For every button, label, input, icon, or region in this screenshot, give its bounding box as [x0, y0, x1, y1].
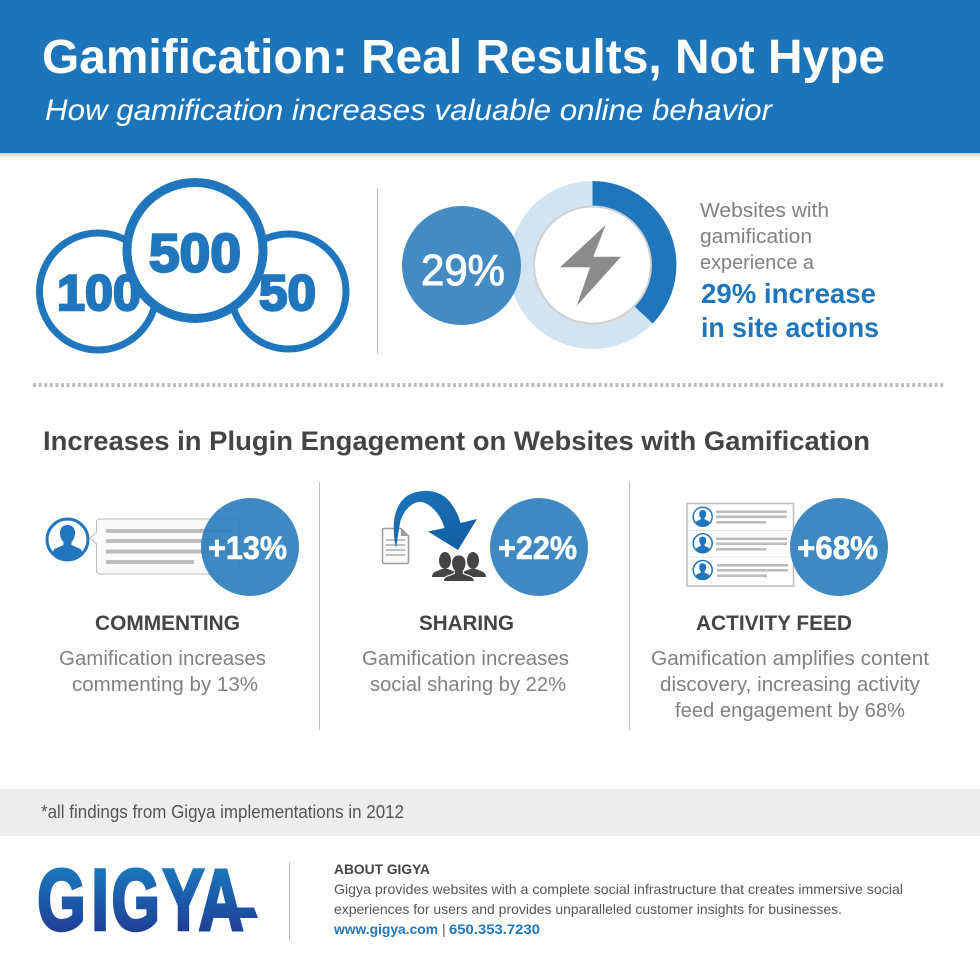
- points circles: 100, 500, 50: [40, 182, 346, 350]
- about text block: 650.353.7230: [449, 921, 540, 937]
- subtitle: How gamification increases valuable online behavior: [45, 94, 773, 127]
- footnote band: [0, 789, 980, 836]
- about text block: [333, 861, 903, 937]
- badge: +68%: [790, 498, 888, 596]
- label: sharing: SHARING: [419, 612, 514, 635]
- panel: sharing: [362, 491, 588, 696]
- badge: 29%: 29%: [421, 246, 505, 295]
- description: activity feed: feed engagement by 68%: [675, 700, 905, 722]
- text block: site actions: in site actions: [701, 312, 879, 343]
- footnote band: *all findings from Gigya implementations in 2012: [41, 802, 404, 822]
- badge: +68%: +68%: [797, 530, 878, 566]
- description: activity feed: discovery, increasing activity: [660, 674, 920, 696]
- about text block: |: [442, 921, 446, 937]
- description: commenting: Gamification increases: [59, 648, 266, 670]
- title: Gamification: Real Results, Not Hype: [42, 31, 885, 84]
- icon: curved arrow: [394, 491, 477, 550]
- header banner: [0, 0, 980, 158]
- section heading: Increases in Plugin Engagement on Websites with Gamification: [43, 426, 870, 456]
- about text block: experiences for users and provides unparalleled customer insights for businesses.: [334, 901, 842, 917]
- points circles: 100, 500, 50: 500: [149, 224, 241, 284]
- badge: +22%: +22%: [498, 530, 577, 566]
- description: commenting: commenting by 13%: [72, 674, 258, 696]
- panel: commenting: [47, 498, 299, 696]
- points circles: 100, 500, 50: 50: [259, 265, 316, 321]
- label: activity feed: ACTIVITY FEED: [696, 612, 852, 635]
- badge: +13%: [201, 498, 299, 596]
- icon: document: [382, 528, 408, 564]
- donut chart: 29% increase: [508, 181, 676, 349]
- description: sharing: Gamification increases: [362, 648, 569, 670]
- icon: group of people: [432, 552, 486, 582]
- badge: +13%: +13%: [208, 530, 287, 566]
- label: commenting: COMMENTING: [95, 612, 240, 635]
- text block: site actions: 29% increase: [701, 278, 876, 309]
- icon: lightning bolt: [560, 225, 621, 306]
- description: sharing: [362, 648, 569, 696]
- icon: activity feed list: [687, 504, 794, 586]
- description: sharing: social sharing by 22%: [370, 674, 566, 696]
- text block: site actions: Websites with: [700, 200, 829, 222]
- description: activity feed: Gamification amplifies content: [651, 648, 929, 670]
- text block: site actions: experience a: [700, 252, 815, 274]
- logo: Gigya: GIGYA: [37, 851, 243, 948]
- text block: site actions: gamification: [700, 226, 812, 248]
- icon: comment bubble: [47, 519, 239, 574]
- about text block: www.gigya.com: [333, 921, 438, 937]
- points circles: 100, 500, 50: 100: [57, 265, 141, 321]
- about text block: ABOUT GIGYA: [334, 861, 430, 877]
- badge: +22%: [490, 498, 588, 596]
- text block: site actions: [700, 200, 879, 343]
- panel: activity feed: [651, 498, 929, 722]
- description: activity feed: [651, 648, 929, 722]
- about text block: Gigya provides websites with a complete social infrastructure that creates immersive social: [334, 881, 903, 897]
- badge: 29%: [402, 206, 521, 325]
- description: commenting: [59, 648, 266, 696]
